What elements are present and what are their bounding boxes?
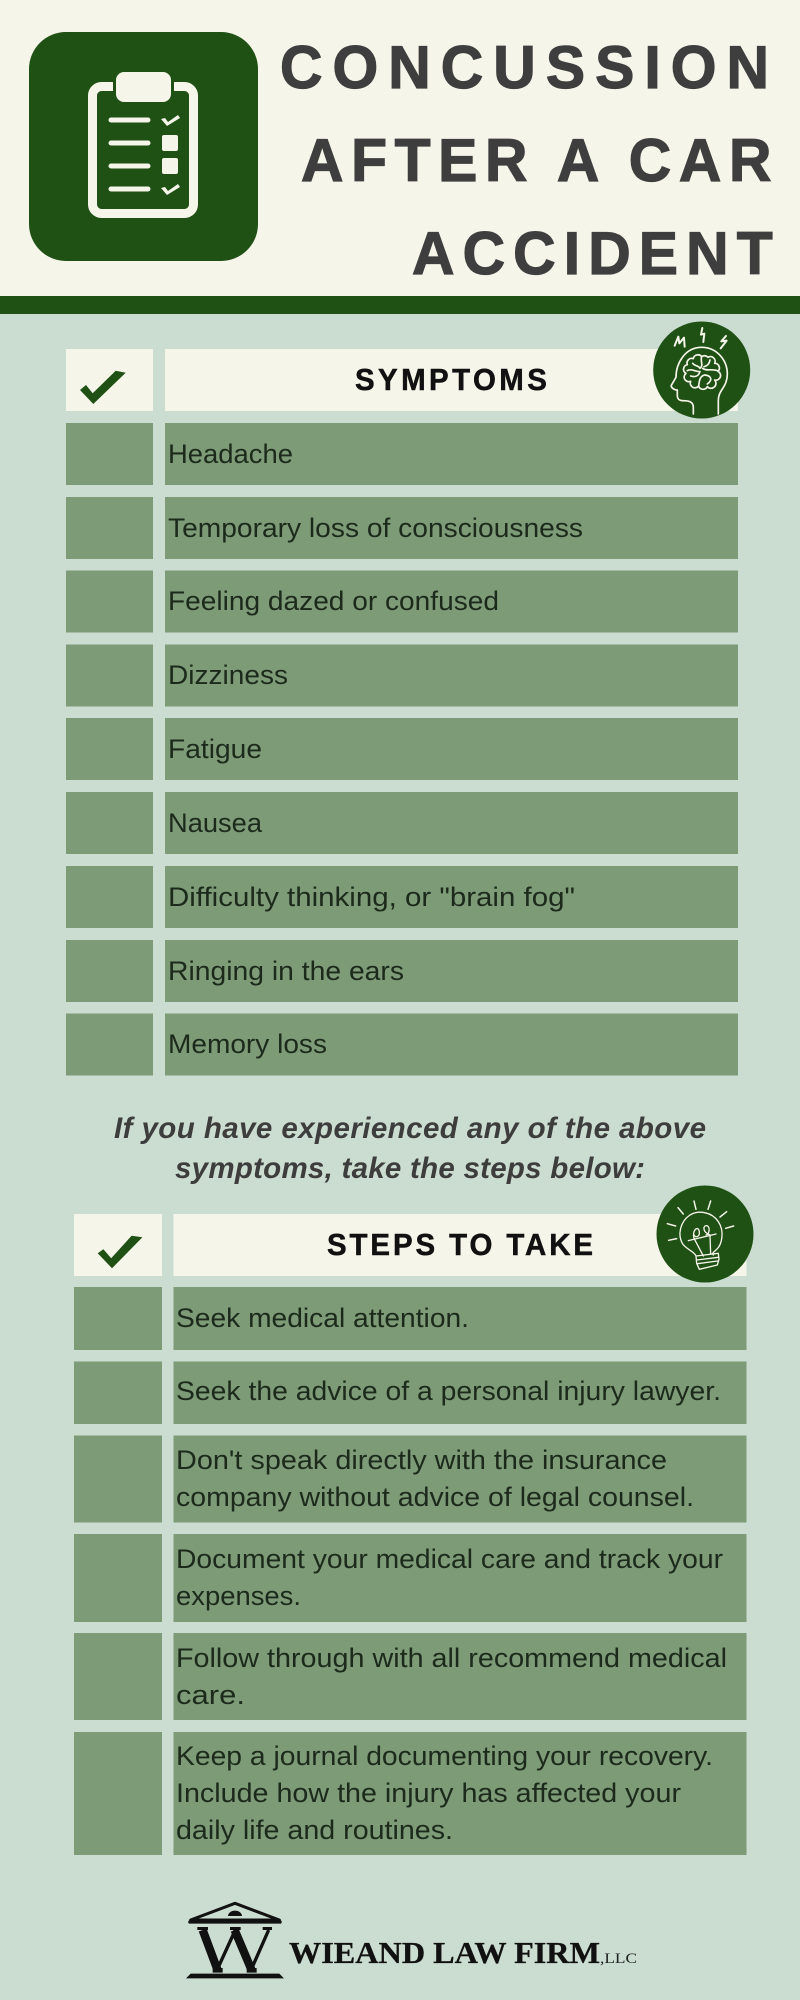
panel: symptoms bbox=[66, 322, 750, 1076]
row: Temporary loss of consciousness bbox=[66, 497, 738, 559]
callout text: symptoms, take the steps below: bbox=[175, 1152, 645, 1185]
step: Document care bbox=[74, 1534, 746, 1622]
row: Nausea bbox=[66, 792, 738, 854]
title: AFTER A CAR bbox=[301, 126, 771, 194]
row: Ringing in the ears bbox=[66, 940, 738, 1002]
icon: clipboard bbox=[29, 32, 258, 261]
row: Temporary loss of consciousness: Temporary loss of consciousness bbox=[168, 513, 583, 543]
title: ACCIDENT bbox=[412, 219, 773, 287]
icon: courthouse W bbox=[186, 1903, 284, 1978]
step: Follow through: care. bbox=[176, 1680, 245, 1710]
step: Keep a journal: daily life and routines. bbox=[176, 1815, 453, 1845]
step: Seek medical attention: Seek medical attention. bbox=[176, 1303, 469, 1333]
row: Fatigue bbox=[66, 718, 738, 780]
step: Keep a journal bbox=[74, 1732, 746, 1855]
logo: Wieand Law Firm: WIEAND LAW FIRM bbox=[289, 1936, 600, 1970]
row: Nausea: Nausea bbox=[168, 808, 262, 838]
symptoms header row: SYMPTOMS bbox=[355, 363, 547, 397]
steps header row: STEPS TO TAKE bbox=[327, 1228, 593, 1262]
step: Seek lawyer: Seek the advice of a personal injury lawyer. bbox=[176, 1376, 721, 1406]
row: Fatigue: Fatigue bbox=[168, 734, 262, 764]
row: Memory loss: Memory loss bbox=[168, 1029, 327, 1059]
row: Memory loss bbox=[66, 1014, 738, 1076]
row: Dizziness: Dizziness bbox=[168, 660, 288, 690]
row: Dizziness bbox=[66, 644, 738, 706]
row: Ringing in the ears: Ringing in the ears bbox=[168, 956, 404, 986]
row: Headache bbox=[66, 423, 738, 485]
step: Insurance company bbox=[74, 1436, 746, 1522]
step: Document care: expenses. bbox=[176, 1581, 301, 1611]
callout text bbox=[114, 1112, 706, 1185]
row: Difficulty thinking: Difficulty thinking, or "brain fog" bbox=[168, 882, 575, 912]
step: Document care: Document your medical care and track your bbox=[176, 1544, 723, 1574]
steps header row bbox=[74, 1214, 746, 1276]
step: Keep a journal: Include how the injury has affected your bbox=[176, 1778, 681, 1808]
logo: Wieand Law Firm bbox=[186, 1903, 637, 1978]
row: Feeling dazed or confused bbox=[66, 570, 738, 632]
step: Follow through bbox=[74, 1633, 746, 1720]
step: Keep a journal: Keep a journal documenting your recovery. bbox=[176, 1741, 713, 1771]
step: Seek medical attention bbox=[74, 1287, 746, 1350]
logo: Wieand Law Firm: ,LLC bbox=[600, 1951, 637, 1967]
step: Insurance company: Don't speak directly with the insurance bbox=[176, 1445, 667, 1475]
callout text: If you have experienced any of the above bbox=[114, 1112, 706, 1145]
step: Seek lawyer bbox=[74, 1362, 746, 1424]
row: Difficulty thinking bbox=[66, 866, 738, 928]
header band bbox=[0, 0, 800, 314]
panel: steps to take bbox=[74, 1186, 754, 1855]
row: Headache: Headache bbox=[168, 439, 293, 469]
title: CONCUSSION bbox=[280, 33, 769, 101]
step: Follow through: Follow through with all recommend medical bbox=[176, 1643, 727, 1673]
icon: head with brain bbox=[653, 322, 750, 418]
step: Insurance company: company without advice of legal counsel. bbox=[176, 1482, 694, 1512]
symptoms header row bbox=[66, 349, 738, 411]
title bbox=[280, 33, 773, 287]
icon: light bulb bbox=[656, 1186, 754, 1282]
row: Feeling dazed or confused: Feeling dazed or confused bbox=[168, 586, 499, 616]
